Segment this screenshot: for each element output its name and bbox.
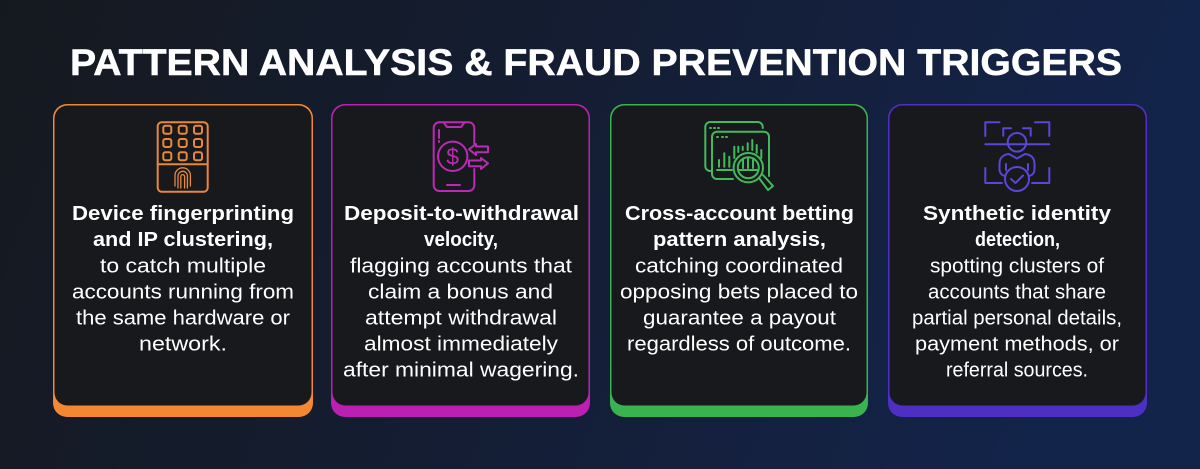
text: device fingerprinting: Device fingerprinting <box>72 203 294 225</box>
text: synthetic identity: spotting clusters of <box>930 256 1104 278</box>
title: PATTERN ANALYSIS & FRAUD PREVENTION TRIGGERS <box>70 42 1122 83</box>
text: synthetic identity: accounts that share <box>928 282 1106 304</box>
icon: keypad with fingerprint <box>158 122 208 192</box>
icon: windows with chart and magnifier <box>705 122 773 190</box>
text: deposit-to-withdrawal velocity: flagging accounts that <box>350 256 572 278</box>
text: device fingerprinting <box>72 203 294 356</box>
text: deposit-to-withdrawal velocity: attempt withdrawal <box>365 308 557 330</box>
text: device fingerprinting: the same hardware or <box>76 308 290 330</box>
text: synthetic identity: payment methods, or <box>915 334 1119 356</box>
text: deposit-to-withdrawal velocity: velocity, <box>424 229 498 251</box>
text: cross-account betting: catching coordinated <box>635 256 843 278</box>
icon: phone with dollar and arrows: $ <box>446 144 459 170</box>
text: cross-account betting: opposing bets placed to <box>620 282 858 304</box>
panel: cross-account betting <box>610 104 868 417</box>
text: cross-account betting: regardless of outcome. <box>627 334 851 356</box>
icon: phone with dollar and arrows <box>434 122 488 191</box>
text: synthetic identity <box>912 203 1122 382</box>
text: synthetic identity: referral sources. <box>946 360 1088 382</box>
text: device fingerprinting: and IP clustering, <box>93 229 273 251</box>
card background: magenta <box>331 104 590 417</box>
text: cross-account betting: pattern analysis, <box>653 229 826 251</box>
text: cross-account betting: Cross-account betting <box>625 203 854 225</box>
text: deposit-to-withdrawal velocity: Deposit-to-withdrawal <box>344 203 579 225</box>
text: deposit-to-withdrawal velocity: almost immediately <box>364 334 558 356</box>
text: deposit-to-withdrawal velocity: after minimal wagering. <box>343 360 579 382</box>
card background: orange <box>53 104 313 417</box>
text: device fingerprinting: accounts running from <box>72 282 294 304</box>
text: device fingerprinting: network. <box>139 334 227 356</box>
text: device fingerprinting: to catch multiple <box>100 256 266 278</box>
text: deposit-to-withdrawal velocity <box>343 203 579 382</box>
text: deposit-to-withdrawal velocity: claim a bonus and <box>368 282 553 304</box>
text: cross-account betting: guarantee a payout <box>643 308 836 330</box>
icon: face scan with check <box>985 122 1049 191</box>
text: cross-account betting <box>620 203 858 356</box>
panel: synthetic identity <box>888 104 1147 417</box>
panel: deposit-to-withdrawal velocity <box>331 104 590 417</box>
card background: green <box>610 104 868 417</box>
text: synthetic identity: detection, <box>975 229 1060 251</box>
card background: violet <box>888 104 1147 417</box>
text: synthetic identity: Synthetic identity <box>923 203 1112 225</box>
panel: device fingerprinting <box>53 104 313 417</box>
text: synthetic identity: partial personal details, <box>912 308 1122 330</box>
